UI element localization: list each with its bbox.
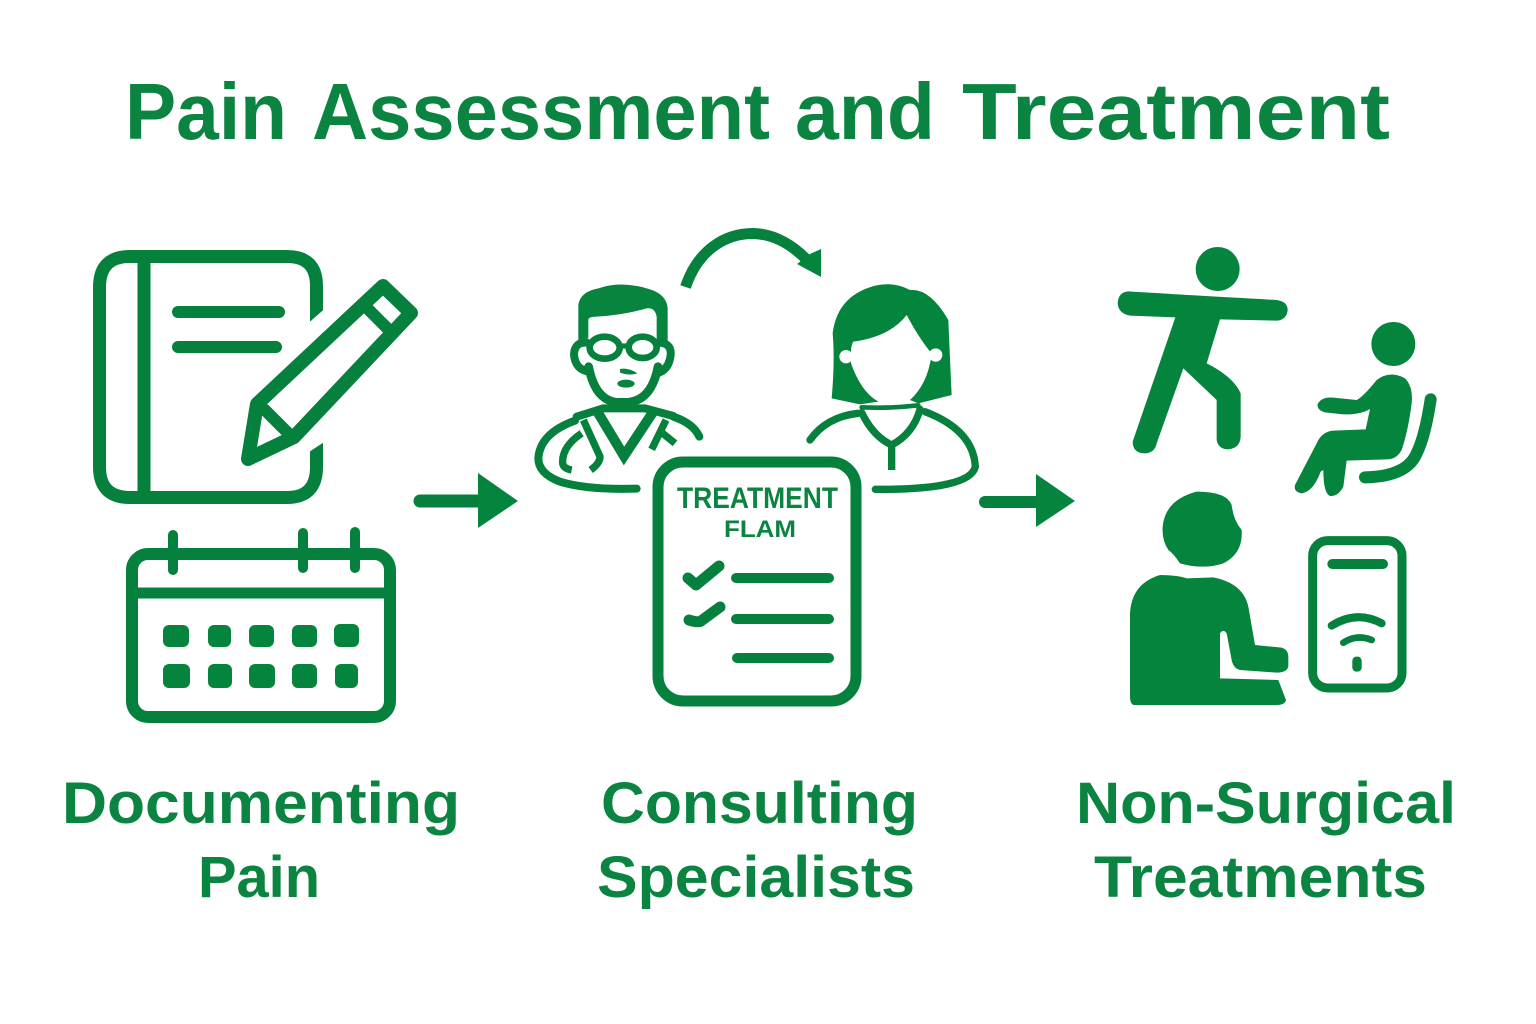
label: consulting specialists: Specialists [597, 845, 915, 910]
icon: treatment plan document [658, 462, 856, 701]
arrow: documenting to consulting [420, 473, 518, 528]
title: Treatment [962, 67, 1390, 156]
icon: notebook [100, 256, 325, 498]
title [125, 67, 1390, 156]
icon: smartphone with signal [1313, 541, 1402, 688]
label: consulting specialists: Consulting [601, 771, 918, 836]
panel: consulting specialists [538, 234, 975, 910]
panel: documenting pain [62, 256, 460, 910]
label: documenting pain [62, 771, 460, 910]
icon: pencil [248, 286, 411, 459]
title: and [795, 67, 935, 156]
title: Pain [125, 67, 287, 156]
icon: female specialist [810, 284, 975, 489]
label: consulting specialists [597, 771, 918, 910]
arrow: consulting to treatments [985, 474, 1075, 527]
icon: seated person [1295, 322, 1431, 496]
icon: calendar [132, 532, 390, 717]
arrow: referral between specialists [686, 234, 821, 287]
panel: non-surgical treatments [1076, 247, 1456, 910]
icon: stretching figure [1118, 247, 1288, 453]
label: documenting pain: Documenting [62, 771, 460, 836]
icon: treatment plan document: FLAM [724, 516, 796, 543]
icon: treatment plan document: TREATMENT [677, 482, 838, 515]
title: Assessment [312, 67, 770, 156]
label: non-surgical treatments: Non-Surgical [1076, 771, 1456, 836]
label: documenting pain: Pain [198, 845, 320, 910]
label: non-surgical treatments: Treatments [1094, 845, 1427, 910]
label: non-surgical treatments [1076, 771, 1456, 910]
icon: person at desk [1130, 492, 1288, 705]
icon: male doctor [538, 284, 699, 489]
